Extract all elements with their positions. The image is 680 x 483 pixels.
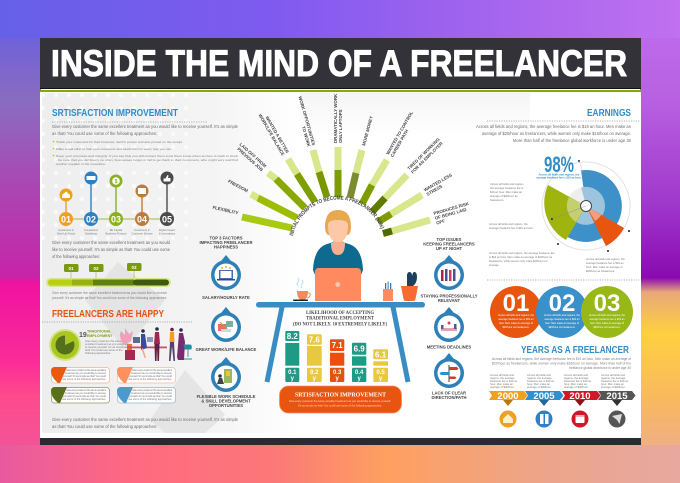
fan labels: STRESS <box>426 184 443 197</box>
callout: peach card: yourself. It's as simple as that! You could <box>129 374 172 378</box>
chart title: LIKELIHOOD OF ACCEPTING <box>306 311 374 316</box>
label: flexible schedule: FLEXIBLE WORK SCHEDULE <box>197 394 256 399</box>
third text block: yourself. It's as simple as that! You could use some of the following approaches: <box>52 296 167 300</box>
circle 01: Across all fields and regions, the <box>498 314 535 317</box>
pen holder <box>383 282 393 301</box>
circle 02: $20/hour as freelancers. <box>549 326 576 329</box>
bar 7.1: 0.3 <box>333 370 342 376</box>
panel: freelancers are happy <box>42 308 239 429</box>
panel: years as a freelancer <box>489 344 636 428</box>
circle 01 <box>490 286 542 338</box>
stat: 19 traditional employment: 19 <box>79 332 87 339</box>
bar: flexibility <box>242 217 292 228</box>
heading: top issues: KEEPING FREELANCERS <box>423 242 475 246</box>
bar 7.6 <box>307 334 322 382</box>
timeline captions: Investment in <box>134 228 150 232</box>
fan labels: WANTED TO CONTROL <box>385 110 414 156</box>
circle 02: hour. Men make an average of <box>545 322 579 325</box>
timeline captions: Marketing <box>85 232 97 236</box>
fan labels <box>212 93 473 226</box>
bar: risk of layoff <box>383 220 430 234</box>
stat description: Give every customer the same <box>85 339 122 343</box>
circle 01: 01 <box>503 290 529 317</box>
years text <box>492 357 632 370</box>
step 03 <box>109 174 123 226</box>
stat: 19 traditional employment: TRADITIONAL <box>87 330 112 334</box>
years text: freelance global workforce is under age 30 <box>569 366 631 370</box>
poster card <box>40 90 641 439</box>
coffee cup <box>293 278 310 301</box>
fan labels: WANTED A BETTER <box>265 115 290 155</box>
column notes: freelance fee is $19 an <box>564 379 592 383</box>
note 4: hour. Men make an average of <box>586 265 623 269</box>
bar 6.9: y <box>358 376 362 382</box>
fan labels: PREVIOUS JOB <box>236 146 264 172</box>
column notes: average of $20/hour. <box>490 385 515 389</box>
heading: top issues: UP AT NIGHT <box>436 246 463 251</box>
donut chart <box>49 329 81 361</box>
years text: $20/hour as freelancers, while women only make $16/hour on average. More than half of the <box>492 362 631 366</box>
column notes: Across all fields and <box>564 373 588 377</box>
callout: orange card: yourself. It's as simple as that! You could <box>63 374 106 378</box>
note 3: average. <box>489 263 500 267</box>
fan labels: FLEXIBILITY <box>212 205 239 215</box>
arc heading: INITIAL PROMPTS TO BECOME A FREELANCER (50%) <box>289 196 384 236</box>
bar: laid off <box>268 173 305 208</box>
callout: olive card: treatment as you would like to receive <box>65 391 106 395</box>
bar 7.6: y <box>313 376 317 382</box>
orange banner: Give every customer the same excellent treatment as you would like to receive yourself. <box>289 399 391 403</box>
callout: blue card: treatment as you would like to receive <box>131 391 172 395</box>
fan labels: FREEDOM <box>227 179 249 194</box>
heading: satisfaction improvement: SRTISFACTION IMPROVEMENT <box>52 107 178 119</box>
note 4 <box>586 257 625 273</box>
fan labels: ONLY LAPTOPS <box>338 109 343 143</box>
years text: Across all fields and regions, the average freelance fee is $19 an hour. Men make an average of <box>492 357 632 361</box>
stat: 98 percent <box>536 152 582 180</box>
note 4: $20/hour as freelancers. <box>586 269 615 273</box>
bullet list <box>53 140 239 166</box>
desk <box>256 302 425 382</box>
note 3: is $19 an hour. Men make an average of $20/hour as <box>489 255 553 259</box>
potted cactus <box>401 272 418 301</box>
timeline captions: Start-Up Funds <box>57 232 76 236</box>
note 2: average freelance fee is $19 an hour. <box>489 226 534 230</box>
label: staying relevant: RELEVANT <box>438 298 461 303</box>
note 4: average freelance fee is $19 an <box>586 261 624 265</box>
bullet list: Make a real effort to train your customers and assist them in every way you can. <box>56 147 172 151</box>
heading: top factors: IMPACTING FREELANCER <box>200 240 252 245</box>
callout: olive card: yourself. It's as simple as that! You could <box>63 394 106 398</box>
label: flexible schedule: & SKILL DEVELOPMENT <box>201 398 251 404</box>
callout: peach card <box>117 367 176 383</box>
column notes: regions, the average <box>601 376 626 380</box>
column notes: average of $20/hour. <box>564 385 589 389</box>
timeline captions: Customer Service <box>131 232 153 236</box>
bar 7.1 <box>330 339 344 382</box>
column notes: hour. Men make an <box>601 382 625 386</box>
laptop <box>315 268 361 301</box>
stat description: following approaches: <box>85 351 111 355</box>
chart title: TRADITIONAL EMPLOYMENT <box>306 316 375 322</box>
note 2 <box>489 222 534 230</box>
stat: 19 traditional employment <box>79 330 113 339</box>
fan labels: MORE MONEY <box>361 115 374 146</box>
step 04: 04 <box>137 214 147 224</box>
panel: numbered circles <box>487 280 640 338</box>
callout: peach card: use some of the following approaches. <box>128 377 172 381</box>
heading: freelancers are happy: FREELANCERS ARE HAPPY <box>52 308 164 320</box>
bar: better balance <box>288 159 315 202</box>
orange banner: It's as simple as that! You could use some of the following approaches. <box>298 404 382 408</box>
bar 6.9: 0.4 <box>355 370 364 376</box>
note 1: freelancers. <box>490 198 504 202</box>
circle 02: average freelance fee is $19 an <box>544 318 580 321</box>
bar 6.1: 0.5 <box>376 370 385 376</box>
note 1: $19 an hour. Men make an <box>490 190 522 194</box>
note 3: freelancers, while women only make $16/hour on <box>489 259 548 263</box>
stat: 98 percent: 98% <box>544 152 574 177</box>
timeline captions: Investment in <box>58 228 74 232</box>
label: flexible schedule: OPPORTUNITIES <box>209 403 243 408</box>
icon: flexible schedule <box>211 357 241 392</box>
bullet list: another supplier in the meantime. <box>56 162 106 166</box>
bar 7.6: 0.2 <box>310 370 319 376</box>
ribbon 2010: 2010 <box>569 391 591 402</box>
panel: earnings <box>476 107 640 273</box>
earnings text: Across all fields and regions, the average freelance fee is $19 an hour. Men make an <box>476 124 632 129</box>
ribbon 2015: 2015 <box>606 391 628 402</box>
column notes <box>490 373 629 389</box>
callout: olive card: Give every customer the same excellent <box>66 388 106 392</box>
label: meeting deadlines: MEETING DEADLINES <box>427 344 471 350</box>
stat: 19 traditional employment: EMPLOYMENT <box>87 334 113 338</box>
timeline captions: Competitive <box>84 228 99 232</box>
stat description: to receive yourself. It's as simple as <box>85 345 128 349</box>
label: flexible schedule <box>197 394 256 408</box>
note 1: the average freelance fee is <box>490 186 524 190</box>
bar 8.2: 0.1 <box>288 370 297 376</box>
icon: signpost <box>434 353 464 388</box>
progress bar with tags: 02 <box>93 266 99 271</box>
bar 6.1: y <box>379 376 383 382</box>
fan labels: LAID OFF FROM <box>238 142 268 169</box>
heading: years as a freelancer: YEARS AS A FREELANCER <box>521 344 629 356</box>
column notes: average of $20/hour. <box>601 385 626 389</box>
second text block: like to receive yourself. It's as simple as that! You could use some <box>52 247 171 252</box>
timeline <box>57 172 176 236</box>
column notes: regions, the average <box>490 376 515 380</box>
progress bar with tags: 03 <box>131 265 137 270</box>
fan labels: WANTED LESS <box>423 172 453 192</box>
bar 7.6: 7.6 <box>309 336 320 344</box>
illustration: freelancer at desk <box>256 210 425 382</box>
bar 8.2 <box>285 331 299 382</box>
column notes: Across all fields and <box>527 373 551 377</box>
panel: top factors <box>196 236 257 408</box>
icon: staying relevant <box>434 255 464 290</box>
column notes: hour. Men make an <box>490 382 514 386</box>
circle 02 <box>536 286 588 338</box>
orange banner: SRTISFACTION IMPROVEMENT <box>295 392 387 398</box>
fan labels: TIRED OF WORKING <box>406 136 441 171</box>
fan labels: TO WORK <box>301 126 312 148</box>
fan labels: WORK OPPORTUNITIES <box>297 96 316 146</box>
fan labels: PRODUCES RISK <box>433 201 470 216</box>
column notes: regions, the average <box>527 376 552 380</box>
bar: dramatically <box>334 147 342 197</box>
timeline captions: Business Finance <box>105 232 127 236</box>
bar: tired of employer <box>372 175 407 212</box>
circle 03: average freelance fee is $19 an <box>589 318 625 321</box>
circle 01: hour. Men make an average of <box>499 322 533 325</box>
column notes: freelance fee is $19 an <box>490 379 518 383</box>
bar 6.1 <box>373 349 388 382</box>
column notes: freelance fee is $19 an <box>601 379 629 383</box>
ribbon 2000: 2000 <box>497 391 519 402</box>
fan labels: OF BEING LAID <box>434 207 467 221</box>
progress bar with tags: 01 <box>68 266 74 271</box>
fan labels: DRAMATICALLY WORK <box>333 93 338 143</box>
bottom bar <box>40 438 641 445</box>
second text block <box>52 240 171 259</box>
fan labels: CAREER PATH <box>390 129 409 158</box>
note 1: average of $20/hour as <box>490 194 518 198</box>
note 2: Across all fields and regions, the <box>489 222 528 226</box>
intro text: Give every customer the same excellent treatment as you would like to receive yourself. It's as simple <box>52 124 239 129</box>
column notes: average of $20/hour. <box>527 385 552 389</box>
panel: top issues <box>420 237 478 400</box>
bar 6.9 <box>352 343 366 382</box>
bullet list: Thank your customers for their business, itself in person and also printed on the receipt. <box>56 140 183 144</box>
ribbon 2005: 2005 <box>533 391 555 402</box>
bar: less stress <box>378 195 422 222</box>
heading: top factors <box>200 236 252 250</box>
callout: blue card: use some of the following approaches. <box>128 397 172 401</box>
label: signpost: DIRECTION/PATH <box>432 395 466 400</box>
circle 01: $20/hour as freelancers. <box>503 326 530 329</box>
stat description <box>85 339 129 355</box>
timeline captions: Bit Capital <box>110 228 123 232</box>
column notes: freelance fee is $19 an <box>527 379 555 383</box>
stat: 98 percent: Across all fields and regions, the <box>539 172 580 176</box>
circle 03: Across all fields and regions, the <box>589 314 626 317</box>
stat: 98 percent: average freelance fee is $19 an hour. <box>536 176 582 180</box>
heading: top factors: TOP 3 FACTORS <box>209 236 243 240</box>
fan labels: OFF <box>436 218 446 226</box>
bar 7.1: y <box>336 376 340 382</box>
ribbon 2010 <box>562 391 600 428</box>
chart: likelihood of accepting traditional employment <box>285 311 388 382</box>
column notes: regions, the average <box>564 376 589 380</box>
column notes: hour. Men make an <box>527 382 551 386</box>
circle 03: $20/hour as freelancers. <box>594 326 621 329</box>
ribbon 2005 <box>525 391 564 428</box>
bar: freedom <box>251 194 297 218</box>
callout: orange card: use some of the following approaches. <box>62 377 106 381</box>
intro text: as that! You could use some of the following approaches: <box>52 131 157 136</box>
circle 02: 02 <box>549 290 575 317</box>
label: staying relevant: STAYING PROFESSIONALLY <box>420 294 478 298</box>
bar: control career <box>362 160 387 204</box>
note 3 <box>489 251 555 267</box>
circle 02: Across all fields and regions, the <box>544 314 581 317</box>
icon: salary <box>211 255 241 290</box>
icon: meeting deadlines <box>434 307 464 342</box>
step 03: 03 <box>111 214 121 224</box>
bar 6.9: 6.9 <box>354 344 365 354</box>
chart title: (DO NOT LIKELY. 10 EXTREMELY LIKELY) <box>293 322 387 328</box>
step 03: $ <box>115 179 118 185</box>
heading: top issues: TOP ISSUES <box>437 237 462 242</box>
callout: blue card: yourself. It's as simple as that! You could <box>129 394 172 398</box>
callout: orange card: Give every customer the same excellent <box>66 368 106 372</box>
third text block <box>52 291 167 300</box>
second text block: of the following approaches: <box>52 254 100 259</box>
step 05: 05 <box>162 214 172 224</box>
intro text <box>52 124 239 136</box>
stat description: that! You could use some of the <box>85 348 123 352</box>
bar 6.1: 6.1 <box>375 350 387 360</box>
bar: work opportunities <box>313 150 327 197</box>
note 1: Across all fields and regions, <box>490 182 524 186</box>
timeline captions: Digital Impact <box>159 228 175 232</box>
bullet list: - be sure that you do! Every so often, businesses forget or fail to get back to their customers, who might very well find <box>56 158 238 162</box>
column notes: Across all fields and <box>490 373 514 377</box>
ribbon 2000 <box>489 391 528 428</box>
fan labels: FOR AN EMPLOYER <box>410 140 444 175</box>
column notes: Across all fields and <box>601 373 625 377</box>
callout: olive card <box>51 387 110 403</box>
heading: top factors: HAPPINESS <box>214 244 238 250</box>
earnings text: average of $20/hour as freelancers, while women only make $16/hour on average. <box>482 131 631 136</box>
icon: work life balance <box>211 307 241 342</box>
progress bar with tags <box>46 263 171 287</box>
callout: blue card: Give every customer the same excellent <box>132 388 172 392</box>
callout: blue card <box>117 387 176 403</box>
earnings text: More than half of the freelance global workforce is under age 30 <box>513 138 632 143</box>
closing text: as that! You could use some of the following approaches: <box>52 424 157 429</box>
note 4: Across all fields and regions, the <box>586 257 625 261</box>
callout: peach card: treatment as you would like to receive <box>131 371 172 375</box>
circle 03 <box>581 286 633 338</box>
earnings text <box>476 124 632 143</box>
heading: earnings: EARNINGS <box>587 107 631 119</box>
stat description: excellent treatment as you would like <box>85 342 129 346</box>
circle 03: hour. Men make an average of <box>590 322 624 325</box>
third text block: Give every customer the same excellent treatment as you would like to receive <box>52 291 167 295</box>
bar: more money <box>350 150 362 198</box>
callout: orange card: treatment as you would like to receive <box>65 371 106 375</box>
chart title <box>293 311 387 328</box>
note 3: Across all fields and regions, the average freelance fee <box>489 251 555 255</box>
label: work life balance: GREAT WORK/LIFE BALANCE <box>196 347 257 352</box>
callout: olive card: use some of the following approaches. <box>62 397 106 401</box>
woman <box>313 210 363 275</box>
fan chart: initial prompts <box>212 93 470 237</box>
note 1 <box>490 182 524 202</box>
step 02: 02 <box>86 214 96 224</box>
fan labels: WORK/LIFE BALANCE <box>258 113 286 157</box>
panel: satisfaction improvement <box>46 107 239 300</box>
bar 8.2: 8.2 <box>287 332 298 341</box>
timeline captions: & Innovations <box>159 232 176 236</box>
bullet list: Keep your promises and integrity. If you say that you will contact them to let them know when an item is back in stock <box>56 154 239 158</box>
callout: peach card: Give every customer the same excellent <box>132 368 172 372</box>
closing text: Give every customer the same excellent treatment as you would like to receive yourself. It's as simple <box>52 417 239 422</box>
circle 01: average freelance fee is $19 an <box>498 318 534 321</box>
heading: top issues <box>423 237 475 251</box>
bar 7.1: 7.1 <box>332 341 343 350</box>
bar 8.2: y <box>291 376 295 382</box>
callout: orange card <box>51 367 110 383</box>
illustration: office team <box>120 327 192 361</box>
label: signpost: LACK OF CLEAR <box>432 390 466 396</box>
radial chart <box>542 160 630 252</box>
timeline captions <box>57 228 176 236</box>
label: salary: SALARY/HOURLY RATE <box>202 295 250 300</box>
second text block: Give every customer the same excellent treatment as you would <box>52 240 171 245</box>
label: signpost <box>432 390 466 400</box>
orange banner <box>280 386 402 413</box>
closing text <box>52 417 239 429</box>
ribbon 2015 <box>598 391 636 428</box>
label: staying relevant <box>420 294 478 303</box>
step 01: 01 <box>61 214 71 224</box>
circle 03: 03 <box>594 290 620 317</box>
column notes: hour. Men make an <box>564 382 588 386</box>
